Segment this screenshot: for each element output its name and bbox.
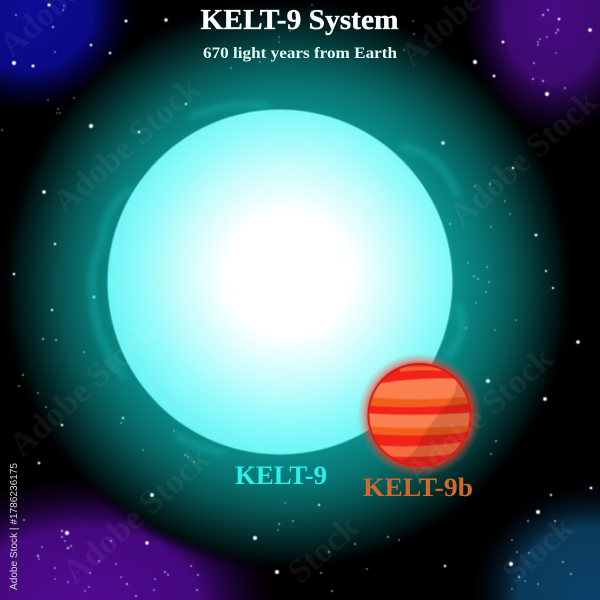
planet glow [358,353,482,477]
nebula: top left blue [0,0,136,112]
star flares [92,105,462,453]
label: KELT-9b: KELT-9b [363,472,473,502]
star: KELT-9 [108,110,452,454]
label: KELT-9: KELT-9 [235,460,327,490]
planet: KELT-9b [368,363,472,467]
nebula: top right purple [460,0,600,137]
nebula: bottom right blue [472,484,600,600]
watermark: Adobe Stock [3,313,164,464]
title: KELT-9 System [200,5,398,36]
watermark: Adobe Stock [46,70,207,221]
watermark: Adobe Stock [443,83,600,234]
watermark: Stock [496,509,581,591]
planet bands [368,366,471,458]
watermark: Stock [281,509,366,591]
planet shadow [402,382,470,465]
watermark: Adobe Stock [201,120,362,271]
nebula: bottom left purple [0,477,275,600]
subtitle: 670 light years from Earth [203,45,397,62]
watermark: Adobe Stock [251,270,412,421]
watermark: Adobe Stock [399,340,560,491]
watermark: Adobe Stock [56,440,217,591]
side credit: Adobe Stock | #1786236175 [8,463,20,590]
